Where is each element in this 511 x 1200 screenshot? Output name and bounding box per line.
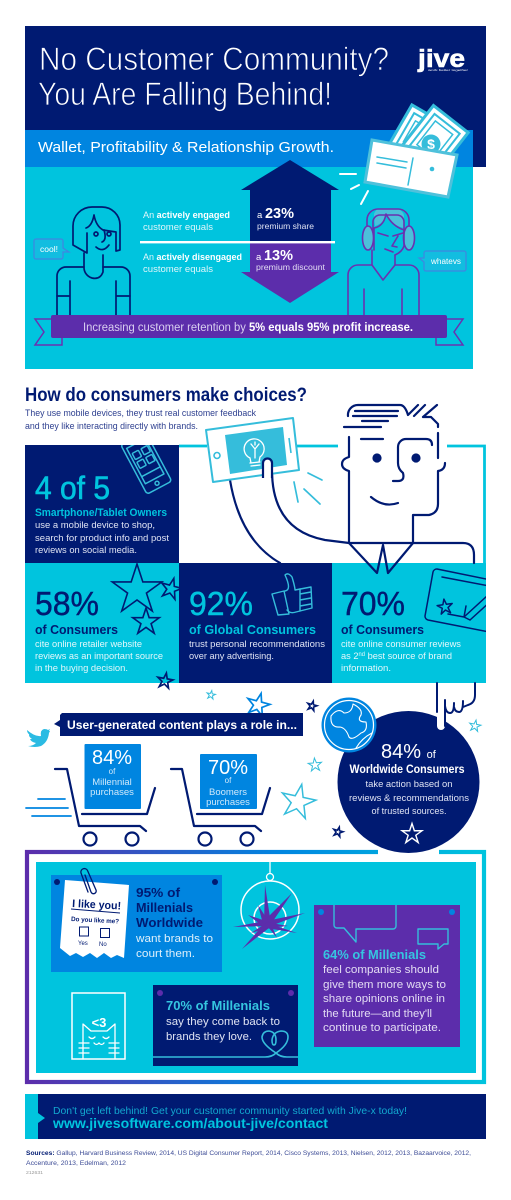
stat: 84% of millennial purchases [84, 744, 141, 809]
text: 70% detail: best source of brand [365, 651, 452, 662]
text: 70% of millenials [166, 998, 280, 1043]
text: 70% of millenials: brands they love. [166, 1031, 252, 1043]
icon: cat poster: <3 [92, 1015, 106, 1030]
panel: 84% worldwide consumers [322, 683, 480, 856]
text: sources: Accenture, 2013, Edelman, 2012 [26, 1160, 126, 1167]
text: worldwide consumers detail [349, 764, 469, 817]
callout: whatevs: whatevs [430, 257, 461, 266]
text: 95% of millenials: Millenials [136, 900, 193, 915]
arrow: down [241, 243, 339, 303]
arrow: up [241, 160, 339, 243]
icon: phone rays [294, 473, 322, 504]
text: smartphone owners: reviews on social media. [35, 545, 137, 556]
title: You Are Falling Behind! [38, 76, 332, 112]
text: 92% detail: over any advertising. [189, 651, 274, 662]
text: section intro: They use mobile devices, they trust real customer feedback [25, 408, 256, 419]
panel: call to action: Don't get left behind! Get your customer community started with Jive-x today! [53, 1105, 407, 1117]
panel: call to action: www.jivesoftware.com/about-jive/contact [52, 1116, 329, 1131]
text: 92% detail [189, 622, 325, 662]
text: sources: 212631 [26, 1170, 44, 1175]
icon: wallet with money [340, 105, 468, 204]
text: section intro [25, 408, 256, 432]
stat: 4 of 5: 4 of 5 [35, 470, 110, 506]
stat: 70% of boomers purchases: Boomers [209, 787, 247, 798]
panel: header [25, 26, 486, 167]
text: 92% detail: of Global Consumers [189, 622, 316, 637]
icon: note [60, 869, 129, 958]
icon: review card with pencil [424, 568, 486, 632]
text: 64% of millenials: share opinions online in [323, 993, 445, 1005]
stat: 23% premium share: a 23% [257, 206, 294, 222]
text: 70% detail: information. [341, 663, 391, 674]
panel: 58% [25, 563, 184, 689]
subheading: Wallet, Profitability & Relationship Growth. [38, 140, 334, 156]
text: worldwide consumers detail: of trusted sources. [372, 806, 446, 817]
panel: millennials frame [27, 852, 484, 1082]
text: 64% of millenials [323, 947, 446, 1034]
icon: note: Yes [78, 941, 88, 947]
text: 64% of millenials: the future—and they'll [323, 1008, 432, 1020]
callout: cool [34, 239, 69, 259]
banner: retention [35, 315, 463, 345]
stat: 84% of millennial purchases: Millennial [92, 777, 132, 788]
text: 95% of millenials: court them. [136, 948, 195, 960]
text: worldwide consumers detail: Worldwide Consumers [350, 764, 464, 776]
icon: stars [112, 564, 184, 633]
icon: shopping cart [171, 769, 270, 846]
chart: boomers cart [171, 754, 270, 846]
man: arm, suit and collar [230, 470, 474, 573]
panel: 92% [179, 563, 332, 683]
stat: disengaged label [143, 252, 242, 275]
panel: 70% of millenials [153, 985, 298, 1066]
panel: call to action [25, 1094, 486, 1139]
panel: 95% of millenials [51, 869, 222, 972]
text: 70% of millenials: 70% of Millenials [166, 998, 270, 1013]
icon: ornament [233, 862, 305, 949]
figure: disengaged customer [348, 209, 419, 317]
stat: 84% of millennial purchases: purchases [90, 787, 134, 798]
callout: whatevs [419, 251, 466, 271]
text: sources: Sources: Gallup, Harvard Business Review, 2014, US Digital Consumer Report, 2014, Cisco Systems, 2013, Nielsen, 2012, 2013, Bazaarvoice, 2012, [26, 1150, 471, 1157]
text: 64% of millenials: feel companies should [323, 964, 439, 976]
stat: 84% of millennial purchases: 84% [92, 747, 132, 769]
callout: user-generated content [54, 713, 303, 736]
stat: disengaged label: customer equals [143, 264, 213, 275]
text: sources [26, 1150, 471, 1175]
stat: engaged label: An actively engaged [143, 210, 230, 221]
callout: user-generated content: User-generated content plays a role in... [67, 718, 297, 732]
text: 70% of millenials: say they come back to [166, 1016, 280, 1028]
icon: wallet with money: $ [427, 136, 435, 152]
icon: globe [322, 698, 376, 752]
stat: 84% of millennial purchases: of [109, 767, 116, 776]
panel: wallet, profitability and relationship growth [25, 105, 473, 369]
text: 58% detail: reviews as an important source [35, 651, 163, 662]
stat: 70% of boomers purchases: 70% [208, 757, 248, 779]
text: 58% detail: in the buying decision. [35, 663, 128, 674]
text: 58% detail: of Consumers [35, 622, 118, 637]
icon: twitter bird [27, 729, 50, 747]
stat: 13% premium discount [256, 248, 326, 272]
text: worldwide consumers detail: take action based on [366, 779, 452, 790]
stat: 70% of boomers purchases [200, 754, 257, 809]
logo: jive: work better together [428, 68, 468, 72]
text: 95% of millenials [135, 885, 213, 960]
panel: frame around man [179, 446, 484, 563]
icon: shopping cart [55, 769, 155, 846]
icon: heart line [153, 1031, 298, 1057]
text: 70% detail: of Consumers [341, 622, 424, 637]
text: smartphone owners: search for product info and post [35, 533, 169, 544]
decoration: stars [206, 690, 482, 837]
stat: 23% premium share [257, 206, 314, 231]
text: 70% detail: cite online consumer reviews [341, 639, 461, 650]
text: smartphone owners: use a mobile device to shop, [35, 520, 155, 531]
callout: cool: cool! [40, 245, 58, 254]
text: 64% of millenials: give them more ways to [323, 979, 446, 991]
heading: how do consumers make choices: How do consumers make choices? [25, 385, 307, 406]
text: 58% detail: cite online retailer website [35, 639, 142, 650]
panel: 64% of millenials [314, 905, 460, 1047]
icon: speed lines [26, 799, 71, 816]
title: No Customer Community? [39, 41, 389, 77]
icon: cat poster [72, 993, 125, 1059]
stat: 23% premium share: premium share [257, 221, 314, 231]
text: 92% detail: trust personal recommendations [189, 639, 325, 650]
text: 95% of millenials: Worldwide [136, 915, 203, 930]
stat: 58%: 58% [35, 585, 99, 622]
stat: 84% of: 84% of [381, 741, 437, 763]
man: head and hair [342, 405, 445, 543]
stat: engaged label: customer equals [143, 222, 213, 233]
icon: smartphone [121, 445, 172, 494]
chart: millennial cart [26, 744, 155, 846]
text: 95% of millenials: 95% of [136, 885, 181, 900]
icon: note: No [99, 942, 107, 948]
icon: thumbs up [272, 574, 312, 615]
figure: engaged customer [57, 207, 130, 317]
icon: note: Do you like me? [71, 916, 119, 926]
text: 64% of millenials: 64% of Millenials [323, 947, 426, 962]
icon: white star [402, 824, 422, 842]
text: 70% detail [341, 622, 461, 674]
title [38, 41, 389, 112]
icon: note: I like you! [72, 898, 121, 913]
banner: retention: Increasing customer retention by 5% equals 95% profit increase. [83, 322, 413, 334]
stat: disengaged label: An actively disengaged [143, 252, 242, 263]
text: 58% detail [35, 622, 163, 674]
text: smartphone owners: Smartphone/Tablet Owners [35, 507, 167, 519]
stat: 13% premium discount: premium discount [256, 262, 326, 272]
figure: man with phone [206, 405, 474, 573]
icon: speech bubbles [334, 905, 448, 949]
text: worldwide consumers detail: reviews & recommendations [349, 793, 469, 804]
text: 64% of millenials: continue to participate. [323, 1022, 441, 1034]
icon: pointing hand [437, 683, 475, 730]
stat: engaged label [143, 210, 230, 233]
text: 95% of millenials: want brands to [135, 933, 213, 945]
panel: 4 of 5 [25, 445, 179, 563]
stat: 70% of boomers purchases: purchases [206, 797, 250, 808]
stat: 92%: 92% [189, 585, 253, 622]
text: smartphone owners [35, 507, 169, 556]
logo: jive: jive [417, 45, 465, 73]
text: 70% detail: as 2 [341, 651, 359, 662]
stat: 70%: 70% [341, 585, 405, 622]
text: 70% detail: nd [359, 652, 365, 658]
stat: 13% premium discount: a 13% [256, 248, 293, 264]
stat: 70% of boomers purchases: of [225, 776, 232, 785]
icon: phone with lightbulb [206, 418, 299, 482]
panel: 70% [332, 563, 486, 683]
text: section intro: and they like interacting directly with brands. [25, 421, 198, 432]
